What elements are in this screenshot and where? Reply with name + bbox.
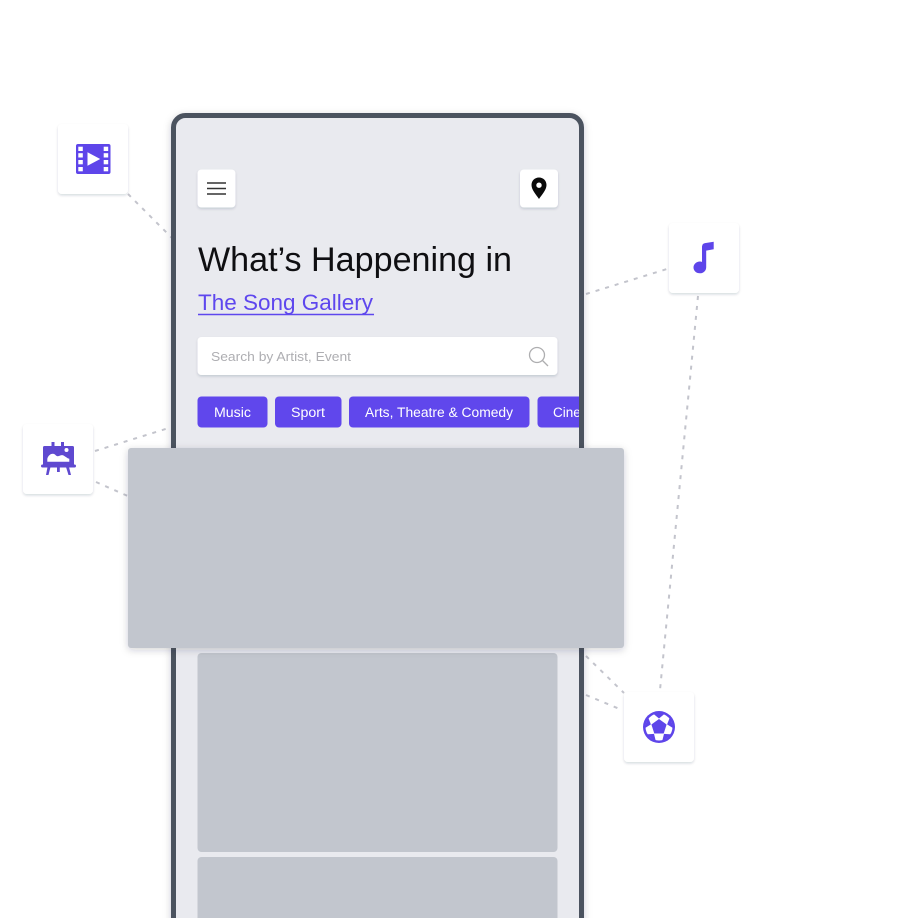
event card placeholder 3	[198, 857, 558, 918]
category filter pills: Cinema	[553, 405, 600, 420]
menu button	[198, 170, 236, 208]
icon card: film	[58, 124, 128, 194]
icon card: easel	[23, 424, 93, 494]
featured event card placeholder	[128, 448, 624, 648]
event card placeholder 2	[198, 653, 558, 852]
category filter pills	[198, 396, 608, 428]
search bar	[198, 337, 558, 375]
icon card: music	[669, 223, 739, 293]
category filter pills: Sport	[291, 405, 325, 420]
title: What’s Happening in	[198, 241, 512, 279]
icon card: soccer ball	[624, 692, 694, 762]
icon: search	[530, 348, 548, 366]
dashed connector lines	[95, 194, 698, 710]
category filter pills: Music	[214, 405, 251, 420]
location pin button	[520, 170, 558, 208]
search bar: Search by Artist, Event	[211, 349, 351, 364]
category filter pills: Arts, Theatre & Comedy	[365, 405, 513, 420]
phone frame	[174, 116, 608, 918]
venue link: The Song Gallery	[198, 290, 373, 315]
